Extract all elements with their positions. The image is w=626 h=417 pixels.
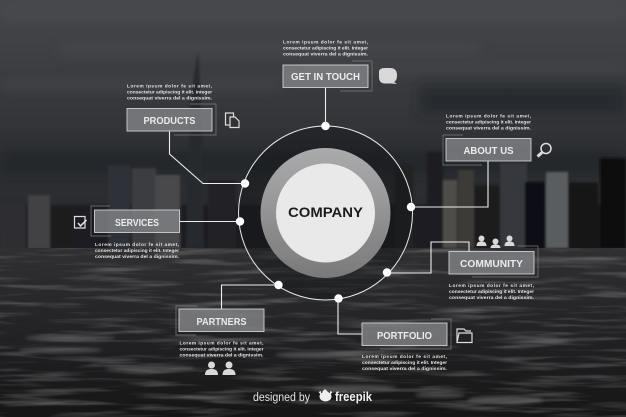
- icon: checklist: [74, 216, 86, 228]
- panel: products: [127, 84, 216, 135]
- panel: about us: ABOUT US: [464, 146, 514, 157]
- credit: designed by freepik: freepik: [335, 390, 372, 404]
- text: portfolio: [362, 354, 448, 372]
- icon: folder: [457, 329, 472, 342]
- connector: partners: [222, 285, 278, 309]
- panel: get in touch: [283, 40, 372, 91]
- icon: speech bubble: [379, 68, 397, 84]
- panel: portfolio: [362, 319, 451, 372]
- panel: partners: [176, 306, 264, 358]
- icon: freepik mascot: [318, 389, 332, 402]
- text: partners: consectetur adipiscing it elit. Integer: [180, 346, 264, 352]
- text: about us: Lorem ipsum dolor fe sit amet,: [446, 114, 532, 120]
- panel: get in touch: GET IN TOUCH: [291, 72, 360, 83]
- text: portfolio: consequat viverra del a dignissim.: [362, 366, 447, 372]
- text: about us: [446, 114, 532, 132]
- circle: outer dark ring: [238, 126, 412, 300]
- credit: designed by freepik: [253, 389, 372, 404]
- text: products: consectetur adipiscing it elit. Integer: [127, 90, 212, 96]
- circle: middle ring: [260, 148, 390, 278]
- ring outline with connector nodes: [236, 122, 415, 303]
- text: community: consequat viverra del a dignissim.: [449, 295, 534, 301]
- text: portfolio: Lorem ipsum dolor fe sit amet,: [362, 354, 448, 360]
- text: products: consequat viverra del a dignissim.: [127, 96, 212, 102]
- text: products: Lorem ipsum dolor fe sit amet,: [127, 84, 213, 90]
- text: get in touch: consequat viverra del a dignissim.: [283, 52, 368, 58]
- panel: community: [449, 246, 538, 301]
- background: city skyline: [0, 52, 626, 249]
- text: get in touch: Lorem ipsum dolor fe sit amet,: [283, 40, 369, 46]
- text: services: consequat viverra del a dignissim.: [95, 254, 179, 260]
- text: about us: consequat viverra del a dignissim.: [446, 126, 531, 132]
- text: partners: [180, 340, 264, 358]
- icon: documents: [226, 113, 239, 128]
- connector: services: [179, 220, 240, 222]
- icon: magnifier: [538, 144, 551, 156]
- circle: company hub: [276, 164, 375, 262]
- text: about us: consectetur adipiscing it elit. Integer: [446, 120, 531, 126]
- connector: about us: [411, 161, 488, 207]
- text: community: Lorem ipsum dolor fe sit amet,: [449, 283, 535, 289]
- panel: portfolio: PORTFOLIO: [377, 331, 432, 342]
- panel: community: COMMUNITY: [460, 259, 523, 270]
- panel: services: [91, 206, 180, 260]
- text: community: [449, 283, 535, 301]
- text: portfolio: consectetur adipiscing it elit. Integer: [362, 360, 447, 366]
- background: sky: [0, 0, 626, 250]
- text: get in touch: consectetur adipiscing it elit. Integer: [283, 46, 368, 52]
- panel: services: SERVICES: [115, 218, 159, 229]
- text: partners: Lorem ipsum dolor fe sit amet,: [180, 340, 264, 346]
- connector: get in touch: [324, 88, 326, 126]
- circle: company hub: COMPANY: [288, 205, 363, 220]
- credit: designed by freepik: designed by: [253, 392, 310, 404]
- panel: products: PRODUCTS: [144, 116, 196, 127]
- icon: community people: [476, 236, 514, 248]
- connector: community: [387, 242, 469, 273]
- text: services: [95, 242, 180, 260]
- text: products: [127, 84, 213, 102]
- icon: partners people: [205, 362, 236, 375]
- connector: portfolio: [338, 298, 362, 334]
- panel: partners: PARTNERS: [196, 317, 247, 328]
- text: partners: consequat viverra del a dignissim.: [180, 352, 264, 358]
- panel: about us: [443, 114, 532, 165]
- text: get in touch: [283, 40, 369, 58]
- text: community: consectetur adipiscing it elit. Integer: [449, 289, 534, 295]
- background: water: [0, 248, 626, 417]
- text: services: Lorem ipsum dolor fe sit amet,: [95, 242, 180, 248]
- connector: products: [170, 131, 245, 184]
- text: services: consectetur adipiscing it elit. Integer: [95, 248, 179, 254]
